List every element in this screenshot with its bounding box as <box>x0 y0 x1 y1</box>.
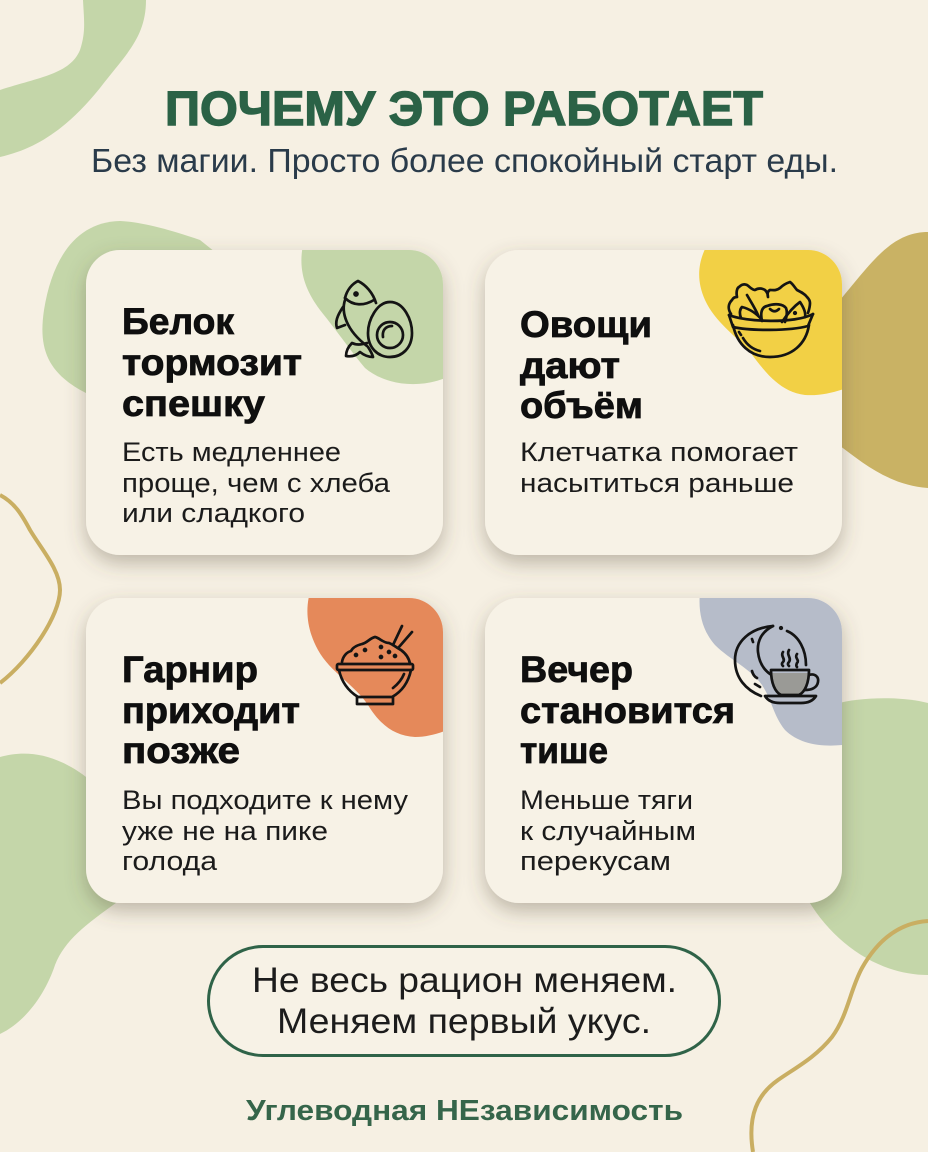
panel: side dish card: голода <box>122 846 218 876</box>
body text: Есть медленнее <box>122 437 341 467</box>
panel: protein card: проще, чем с хлеба <box>122 468 391 498</box>
heading: Вечер <box>520 649 633 690</box>
panel: side dish card: приходит <box>122 690 300 731</box>
body text: Клетчатка помогает <box>520 437 798 467</box>
card accent: green <box>301 245 450 384</box>
icon: rice bowl <box>337 626 413 704</box>
heading: Белок <box>122 301 234 342</box>
panel: protein card <box>86 245 450 555</box>
panel: side dish card: уже не на пике <box>122 816 328 846</box>
panel: vegetables card: дают <box>520 345 620 386</box>
panel: vegetables card: объём <box>520 385 643 426</box>
icon: moon and cup <box>735 626 818 703</box>
background blob: behind first card <box>42 221 300 395</box>
gold line: bottom right <box>751 921 928 1152</box>
body text: Меньше тяги <box>520 785 693 815</box>
subtitle: Без магии. Просто более спокойный старт еды. <box>91 142 838 179</box>
panel: protein card: или сладкого <box>122 498 305 528</box>
background blob: right gold <box>835 232 928 488</box>
panel: evening card <box>485 592 850 903</box>
panel: evening card: становится <box>520 690 735 731</box>
panel: side dish card <box>86 592 450 903</box>
card accent: yellow <box>699 245 850 395</box>
body text: Вы подходите к нему <box>122 785 409 815</box>
panel: side dish card: позже <box>122 730 240 771</box>
icon: fish and egg <box>336 281 412 357</box>
card accent: orange <box>307 592 450 737</box>
background blob: top left <box>0 0 146 157</box>
background blob: bottom right <box>808 698 928 975</box>
panel: vegetables card: насытиться раньше <box>520 468 794 498</box>
panel: evening card: к случайным <box>520 816 696 846</box>
callout pill: Меняем первый укус. <box>277 1002 651 1041</box>
panel: vegetables card <box>485 245 850 555</box>
panel: evening card: тише <box>520 730 608 771</box>
background blob: bottom left <box>0 754 120 1034</box>
heading: Гарнир <box>122 649 258 690</box>
callout pill <box>208 946 720 1056</box>
card accent: grey <box>700 592 850 746</box>
panel: protein card: спешку <box>122 383 265 424</box>
brand footer: Углеводная НЕзависимость <box>246 1095 683 1127</box>
title: ПОЧЕМУ ЭТО РАБОТАЕТ <box>165 83 763 136</box>
heading: Овощи <box>520 304 652 345</box>
icon: salad bowl <box>729 282 813 357</box>
callout pill: Не весь рацион меняем. <box>252 961 677 1000</box>
panel: evening card: перекусам <box>520 846 671 876</box>
gold line: left <box>0 495 60 683</box>
panel: protein card: тормозит <box>122 342 302 383</box>
